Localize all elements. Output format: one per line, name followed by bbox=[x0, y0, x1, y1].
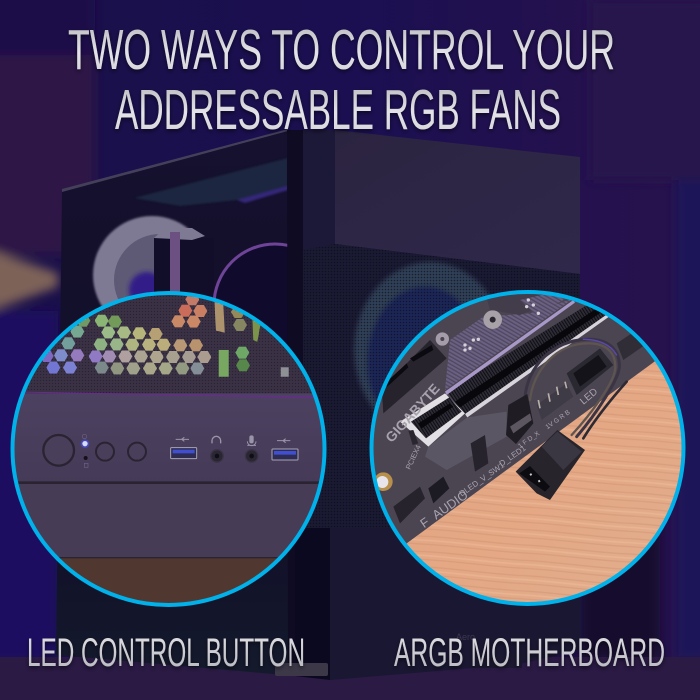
board silkscreen text: LED bbox=[578, 386, 600, 407]
case: glass side panel bbox=[56, 130, 296, 676]
panel: LED control button photo circle bbox=[10, 291, 326, 607]
board silkscreen text: 1V G R B bbox=[544, 409, 572, 431]
table bbox=[0, 657, 700, 700]
board silkscreen text bbox=[382, 380, 600, 531]
brown surface bbox=[60, 558, 277, 603]
board silkscreen text: F_AUDIO bbox=[418, 488, 471, 531]
icon: fan seen through mesh bbox=[354, 262, 506, 438]
reflections through glass bbox=[134, 158, 288, 206]
status LEDs bbox=[81, 434, 89, 467]
board silkscreen text: DLED_V_SW1 bbox=[458, 460, 507, 498]
front control panel bbox=[24, 393, 312, 395]
mesh area with glowing hexagons bbox=[25, 295, 312, 394]
panel: ARGB motherboard photo circle bbox=[370, 290, 686, 606]
pin headers bbox=[393, 330, 645, 523]
title bbox=[68, 18, 615, 142]
LED control button bbox=[96, 443, 114, 461]
board silkscreen text: D_LED1 bbox=[498, 443, 528, 468]
case: left foot bbox=[275, 663, 328, 676]
wood table bbox=[406, 361, 682, 602]
case: front upper panel bbox=[335, 130, 580, 274]
board silkscreen text: 1 F D_X bbox=[517, 430, 542, 450]
header plug bbox=[506, 394, 533, 444]
headphone jack bbox=[211, 436, 223, 462]
ARGB connector bbox=[516, 430, 585, 500]
case: front lower panel bbox=[330, 528, 580, 680]
lower front panel bbox=[0, 484, 350, 558]
case: right foot bbox=[473, 655, 522, 668]
case: front mesh panel bbox=[303, 244, 580, 528]
panel seam bbox=[0, 481, 350, 484]
small screw bbox=[436, 332, 449, 346]
PC case bbox=[56, 129, 580, 680]
USB port left bbox=[171, 437, 197, 459]
reset button bbox=[128, 443, 146, 461]
power button bbox=[43, 435, 74, 466]
icon: purple fan ring bbox=[213, 242, 288, 298]
microphone jack bbox=[245, 435, 258, 462]
left PCIe connectors bbox=[382, 340, 447, 413]
board silkscreen text: GIGABYTE bbox=[382, 380, 443, 445]
striped trace region bbox=[445, 298, 573, 390]
short PCIe slot bbox=[400, 393, 465, 447]
icon: fan ring on glass panel bbox=[92, 214, 205, 306]
motherboard PCB bbox=[350, 280, 700, 613]
main PCIe slot bbox=[445, 300, 613, 417]
label: LED control button: LED CONTROL BUTTON bbox=[27, 631, 305, 675]
mounting screw bbox=[483, 310, 502, 329]
translucent card bracket bbox=[425, 412, 507, 470]
ARGB cable bbox=[525, 339, 627, 438]
USB port right bbox=[272, 439, 298, 460]
case: corner post bbox=[287, 130, 335, 678]
logo on case: Aero bbox=[456, 632, 475, 642]
capacitor bbox=[374, 472, 393, 491]
board silkscreen text: PCIEX4 bbox=[404, 443, 423, 471]
solder dots bbox=[463, 298, 540, 352]
